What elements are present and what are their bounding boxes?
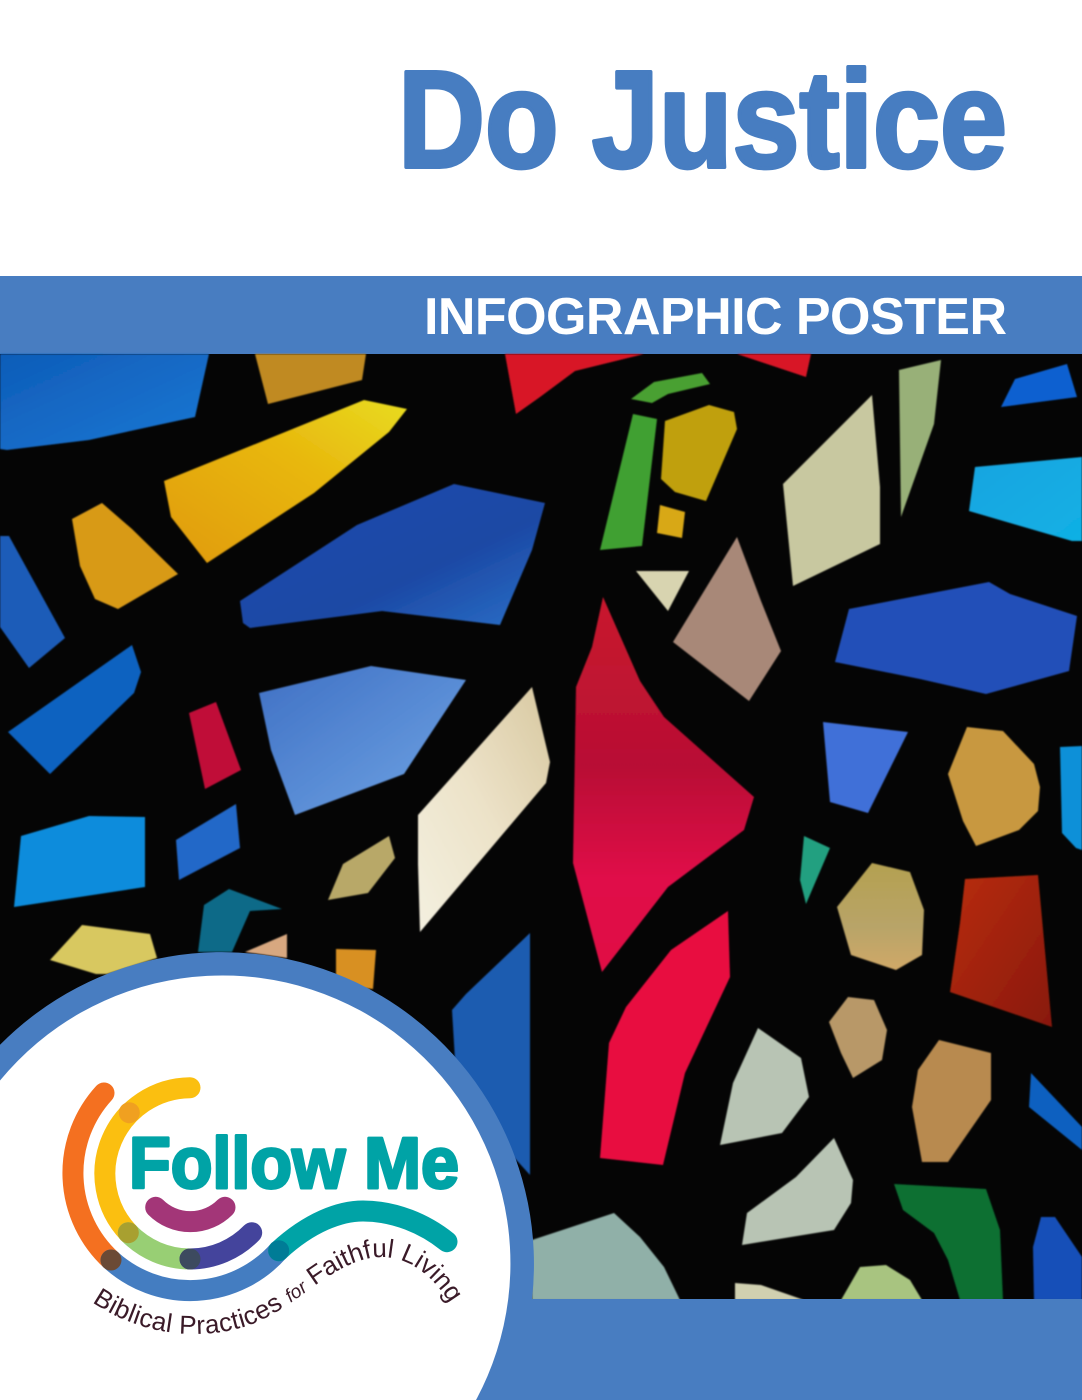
title: Do Justice: [398, 43, 1007, 197]
pale and clear glass pieces: [418, 360, 941, 1300]
logo badge circle: [0, 952, 534, 1400]
banner: infographic poster: INFOGRAPHIC POSTER: [424, 288, 1007, 346]
red glass pieces: [189, 354, 1052, 1165]
logo overlap dots: [100, 1102, 289, 1270]
glass pieces: [0, 354, 1082, 1300]
blue glass pieces: [0, 354, 1082, 1300]
stained glass photograph: [0, 354, 1082, 1300]
logo wordmark: Follow Me: [129, 1124, 459, 1204]
Follow Me logo: [62, 1077, 460, 1334]
banner: infographic poster: [0, 276, 1082, 354]
logo arcs: [73, 1088, 447, 1291]
logo tagline: Biblical Practices for Faithful Living: [94, 1238, 460, 1334]
yellow and gold glass pieces: [50, 354, 1040, 1162]
green glass pieces: [600, 373, 1003, 1300]
bottom blue band: [0, 1299, 1082, 1400]
